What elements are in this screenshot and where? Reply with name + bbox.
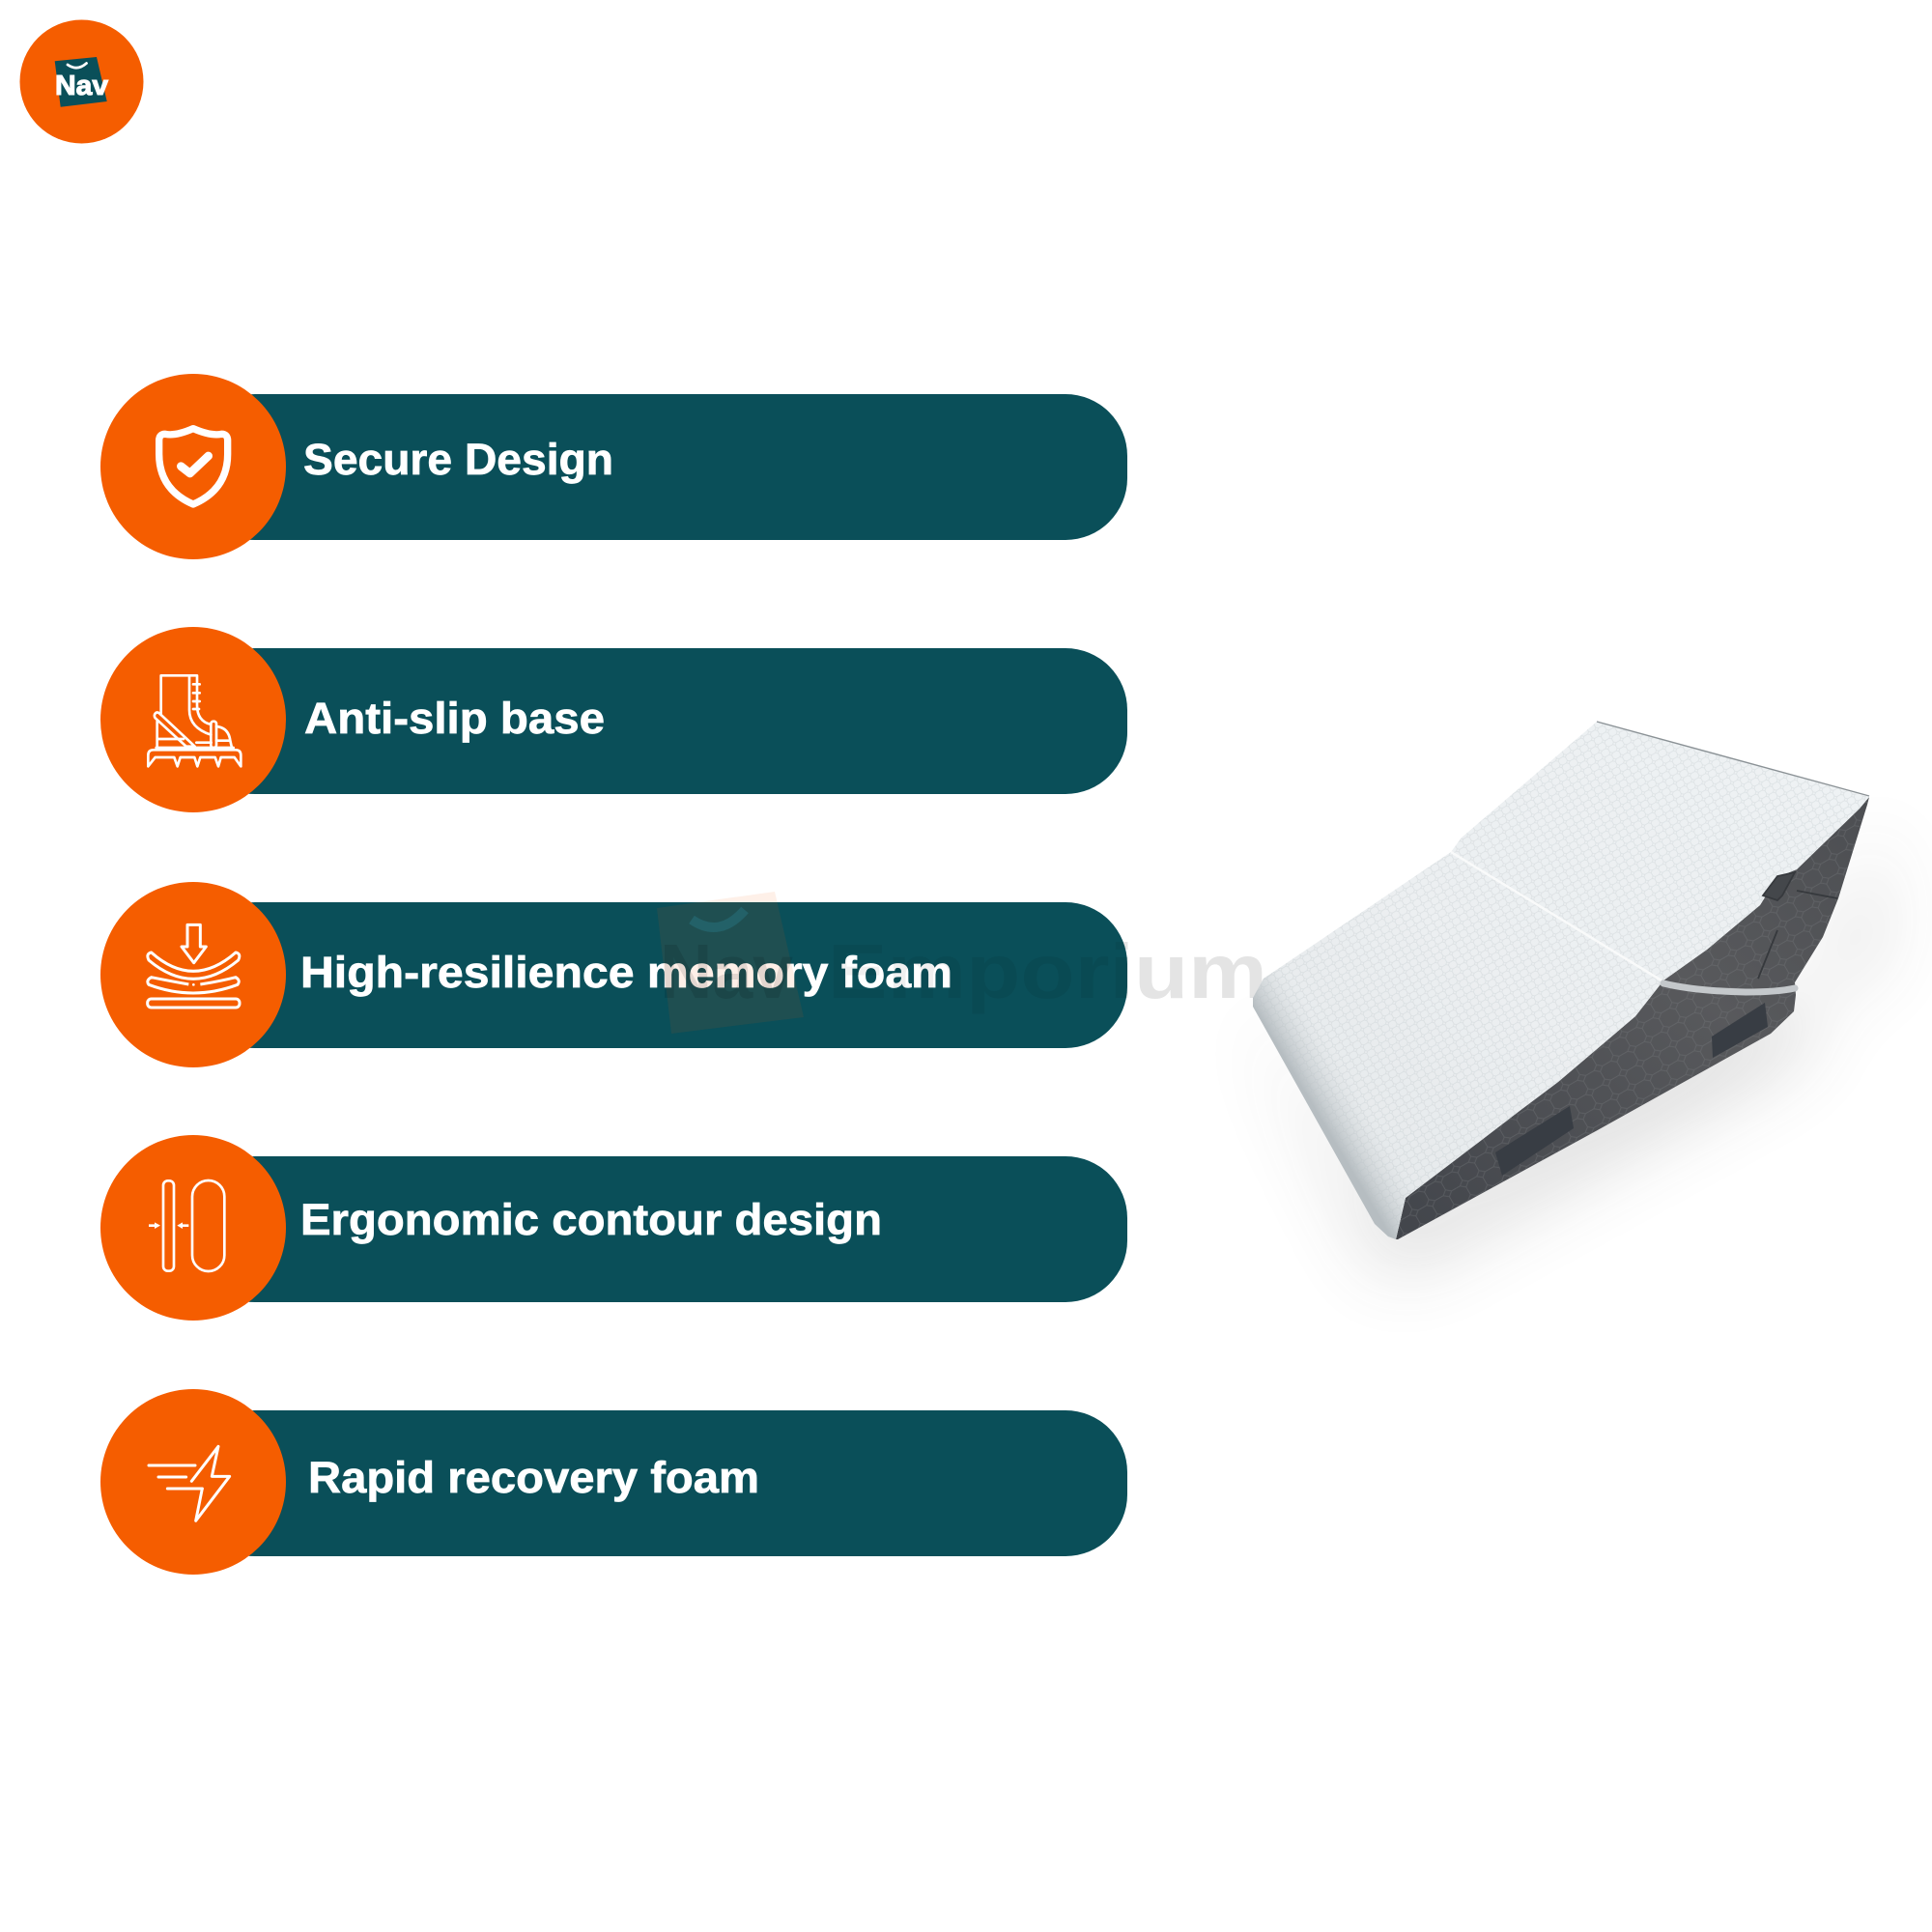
product: wedge pillow bbox=[1253, 722, 1869, 1239]
pillow velcro strap lower bbox=[1495, 1106, 1574, 1176]
feature bar: Ergonomic contour design: Ergonomic contour design bbox=[300, 1195, 882, 1244]
watermark overlay on bar: Emporium bbox=[828, 928, 1267, 1014]
feature bar: High-resilience memory foam: High-resilience memory foam bbox=[300, 948, 952, 997]
icon: shield with check bbox=[100, 374, 286, 559]
pillow grey side panel bbox=[1396, 797, 1869, 1239]
watermark overlay on bar bbox=[657, 892, 951, 1034]
logo badge: Nav bbox=[55, 71, 108, 101]
watermark overlay on bar: Nav bbox=[660, 928, 793, 1014]
watermark text on background: Emporium bbox=[828, 928, 1267, 1014]
pillow pocket handle bbox=[1758, 872, 1837, 979]
icon: memory foam compression bbox=[100, 882, 286, 1067]
feature bar: Rapid recovery foam: Rapid recovery foam bbox=[308, 1453, 759, 1502]
icon: speed lightning bolt bbox=[100, 1389, 286, 1575]
logo badge bbox=[19, 19, 143, 143]
pillow zipper bbox=[1663, 983, 1795, 992]
pillow shadow bbox=[1246, 821, 1884, 1275]
pillow velcro strap upper bbox=[1712, 1003, 1768, 1058]
feature bar: Rapid recovery foam bbox=[193, 1410, 1127, 1556]
icon: cleated boot bbox=[100, 627, 286, 812]
feature bar: High-resilience memory foam bbox=[193, 902, 1127, 1048]
feature bar: Secure Design: Secure Design bbox=[303, 435, 613, 484]
icon: ergonomic contour bbox=[100, 1135, 286, 1321]
feature bar: Anti-slip base bbox=[193, 648, 1127, 794]
feature bar: Secure Design bbox=[193, 394, 1127, 540]
feature bar: Ergonomic contour design bbox=[193, 1156, 1127, 1302]
feature bar: Anti-slip base: Anti-slip base bbox=[304, 694, 605, 743]
pillow white top surface bbox=[1253, 722, 1869, 1239]
